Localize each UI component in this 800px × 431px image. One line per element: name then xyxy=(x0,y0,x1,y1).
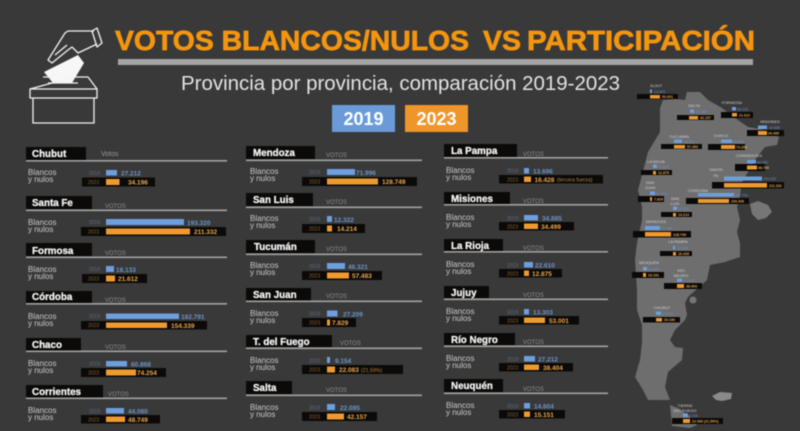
panel: La Pampa: 16.428 xyxy=(534,177,555,184)
mini chart: La Pampa: 13.696 xyxy=(677,246,688,250)
panel: Salta: 2019 xyxy=(309,406,320,412)
mini chart: Salta: 42.157 xyxy=(700,116,711,120)
mini chart: Salta xyxy=(677,103,714,120)
mini chart: Santa Fe: FE xyxy=(713,173,719,178)
panel: Misiones: 2023 xyxy=(507,224,518,230)
legend: 2023: 2023 xyxy=(416,109,457,129)
mini chart: Chaco: 74.254 xyxy=(736,146,747,150)
panel: San Luis: y nulos xyxy=(250,221,275,230)
map: Malvinas xyxy=(712,392,732,401)
panel: T. del Fuego: VOTOS xyxy=(340,341,361,347)
mini chart: Jujuy: 53.001 xyxy=(662,95,673,99)
panel: La Pampa: La Pampa xyxy=(451,146,498,157)
panel: Jujuy xyxy=(444,286,608,325)
panel: Corrientes xyxy=(26,385,227,424)
panel: Tucumán: 46.321 xyxy=(348,264,368,271)
mini chart: Santa Fe xyxy=(709,167,784,188)
panel: Córdoba: 2023 xyxy=(88,323,99,329)
mini chart: La Pampa xyxy=(660,239,692,256)
panel: Neuquén: 2023 xyxy=(507,412,518,418)
panel: Jujuy: 2019 xyxy=(507,310,518,316)
panel: Chaco: Chaco xyxy=(32,340,62,351)
panel: Neuquén: Blancos xyxy=(446,401,474,410)
panel: Chubut: y nulos xyxy=(28,175,53,184)
mini chart: Tierra del Fuego: DEL FUEGO xyxy=(674,408,696,413)
mini chart: Santa Fe: SANTA xyxy=(709,167,723,172)
panel: Córdoba: 182.791 xyxy=(181,314,205,321)
mini chart: Misiones: 34.499 xyxy=(768,132,779,136)
panel: Misiones xyxy=(444,192,608,231)
map: mainland silhouette xyxy=(635,92,779,400)
panel: Río Negro: 38.404 xyxy=(543,365,563,372)
panel: Misiones: VOTOS xyxy=(523,199,544,205)
mini chart: Formosa: FORMOSA xyxy=(722,100,742,105)
panel: Salta: VOTOS xyxy=(326,388,347,394)
panel: Corrientes: 48.749 xyxy=(128,417,148,424)
panel: Tucumán: Tucumán xyxy=(254,242,297,253)
panel: Tucumán: y nulos xyxy=(250,268,275,277)
mini chart: Neuquén: 14.604 xyxy=(648,268,659,272)
panel: Corrientes: y nulos xyxy=(28,413,53,422)
panel: La Rioja xyxy=(444,239,608,278)
panel: Río Negro: 2023 xyxy=(507,366,518,372)
map of Argentina with provincial mini charts xyxy=(632,83,784,428)
mini chart: Tucumán xyxy=(661,134,702,149)
mini chart: Misiones: 34.885 xyxy=(769,126,780,130)
panel: T. del Fuego: 22.083 xyxy=(339,367,359,374)
panel: Córdoba: VOTOS xyxy=(105,298,126,304)
panel: Formosa: 2023 xyxy=(88,276,99,282)
panel: La Rioja: 12.875 xyxy=(532,271,552,278)
panel: La Rioja: 22.610 xyxy=(535,262,555,270)
panel: Neuquén: VOTOS xyxy=(523,387,544,393)
panel: Mendoza xyxy=(246,146,422,186)
panel: Tucumán: 2019 xyxy=(309,264,320,270)
title: PARTICIPACIÓN xyxy=(527,25,755,56)
panel: Mendoza: y nulos xyxy=(250,174,275,183)
mini chart: Mendoza: MENDOZA xyxy=(646,219,666,224)
mini chart: Jujuy xyxy=(637,83,678,99)
mini chart: Corrientes xyxy=(735,153,769,171)
panel: La Rioja: Blancos xyxy=(446,260,474,269)
panel: San Juan: 2023 xyxy=(309,320,320,326)
panel: Mendoza: 128.749 xyxy=(382,179,406,186)
mini chart: La Rioja: 12.875 xyxy=(658,171,669,175)
panel: Tucumán: 57.483 xyxy=(352,273,372,280)
panel: Chubut: Chubut xyxy=(32,149,67,160)
panel: Santa Fe: y nulos xyxy=(28,225,53,234)
panel: Formosa xyxy=(26,243,227,283)
mini chart: La Pampa: 16.428 xyxy=(678,252,689,256)
map: Península Valdés xyxy=(690,296,696,304)
panel: Neuquén xyxy=(444,379,608,419)
mini chart: San Luis: 12.322 xyxy=(678,207,689,211)
panel: Santa Fe: Santa Fe xyxy=(32,198,73,209)
mini chart: Mendoza: 128.749 xyxy=(673,233,686,237)
panel: San Juan xyxy=(246,288,422,327)
panel: San Luis: 2019 xyxy=(309,217,320,223)
mini chart: San Juan: JUAN xyxy=(645,185,655,190)
mini chart: Neuquén: NEUQUÉN xyxy=(639,260,659,265)
panel: Jujuy: 53.001 xyxy=(549,318,569,325)
panel: Chaco: y nulos xyxy=(28,366,53,375)
panel: Salta: 22.085 xyxy=(340,405,360,412)
panel: San Juan: Blancos xyxy=(250,309,278,318)
panel: Tucumán: 2023 xyxy=(309,274,320,280)
panel: Chaco: 2019 xyxy=(89,362,100,368)
panel: Corrientes: 2019 xyxy=(89,409,100,415)
panel: Salta xyxy=(246,381,422,421)
panel: La Pampa xyxy=(444,144,608,184)
panel: San Juan: 27.209 xyxy=(343,312,363,318)
panel: San Juan: 7.829 xyxy=(332,320,349,327)
panel: Chaco: 2023 xyxy=(88,370,99,376)
mini chart: San Luis xyxy=(661,196,692,217)
panel: Chaco xyxy=(26,338,227,377)
mini chart: Córdoba xyxy=(686,188,749,204)
panel: La Rioja: 2019 xyxy=(507,263,518,269)
panel: Misiones: 34.885 xyxy=(542,216,562,222)
panel: Jujuy: Jujuy xyxy=(451,288,477,299)
panel: Neuquén: Neuquén xyxy=(451,381,493,392)
mini chart: Misiones: MISIONES xyxy=(760,119,780,124)
panel: Chubut: Blancos xyxy=(28,168,56,177)
panel: Mendoza: 2019 xyxy=(309,170,320,176)
panel: La Pampa: Blancos xyxy=(446,166,474,175)
mini chart: Chubut: CHUBUT xyxy=(654,305,671,310)
mini chart: Chubut: 34.196 xyxy=(664,318,675,322)
mini chart: Formosa xyxy=(721,100,753,118)
mini chart: San Juan: 27.209 xyxy=(656,192,667,196)
panel: Córdoba: 2019 xyxy=(89,314,100,320)
mini chart: Neuquén xyxy=(632,260,664,278)
panel: Santa Fe xyxy=(26,196,227,236)
panel: Córdoba: 154.339 xyxy=(171,323,195,330)
mini chart: San Juan: SAN xyxy=(646,180,654,185)
panel: Misiones: 2019 xyxy=(507,216,518,222)
panel: San Luis: San Luis xyxy=(253,195,294,206)
panel: Santa Fe: 2019 xyxy=(89,220,100,226)
mini chart: Mendoza: 71.996 xyxy=(661,226,672,230)
panel: Corrientes: 2023 xyxy=(88,418,99,424)
legend: 2019: 2019 xyxy=(343,109,384,129)
panel: San Luis: 12.322 xyxy=(334,217,354,224)
panel: Chubut: Votos xyxy=(101,151,119,158)
panel: San Luis: VOTOS xyxy=(326,200,347,206)
mini chart: Río Negro: 38.404 xyxy=(686,284,697,288)
panel: Neuquén: y nulos xyxy=(446,408,471,417)
legend xyxy=(332,105,468,132)
panel: Jujuy: Blancos xyxy=(446,307,474,316)
panel: Córdoba: y nulos xyxy=(28,319,53,328)
mini chart: Tierra del Fuego: TIERRA xyxy=(678,403,693,408)
panel: Salta: 42.157 xyxy=(347,414,367,421)
title rule xyxy=(118,59,753,65)
panel: Jujuy: y nulos xyxy=(446,314,471,323)
panel: San Luis: 2023 xyxy=(309,226,320,232)
mini chart: Misiones xyxy=(747,119,784,136)
panel: Jujuy: VOTOS xyxy=(523,293,544,299)
panel: Chaco: 74.254 xyxy=(137,370,157,377)
panel: Santa Fe: VOTOS xyxy=(105,204,126,210)
panel: Misiones: y nulos xyxy=(446,220,471,229)
panel: Chaco: VOTOS xyxy=(105,345,126,351)
mini chart: Chaco: CHACO xyxy=(714,133,728,138)
panel: Mendoza: Blancos xyxy=(250,167,278,176)
panel: T. del Fuego: 9.154 xyxy=(335,358,352,365)
icon: hand dropping ballot into box xyxy=(30,28,102,123)
mini chart: Tucumán: 57.483 xyxy=(687,145,698,149)
mini chart: Santa Fe: 193.320 xyxy=(763,177,776,181)
panel: Formosa: VOTOS xyxy=(105,251,126,257)
panel: Río Negro xyxy=(444,333,608,372)
panel: Chaco: 60.868 xyxy=(131,362,151,368)
panel: Corrientes: VOTOS xyxy=(108,392,129,398)
panel: San Luis: 14.214 xyxy=(337,226,357,233)
panel: Tucumán xyxy=(246,240,422,280)
panel: San Luis xyxy=(246,193,422,233)
panel: T. del Fuego: y nulos xyxy=(250,363,275,372)
mini chart: Corrientes: CORRIENTES xyxy=(736,153,762,158)
mini chart: Chaco xyxy=(708,133,747,150)
mini chart: Río Negro xyxy=(664,268,702,289)
panel: La Pampa: VOTOS xyxy=(523,152,544,158)
panel: Río Negro: 27.212 xyxy=(538,356,558,364)
panel: Corrientes: Blancos xyxy=(28,406,56,415)
panel: T. del Fuego: T. del Fuego xyxy=(253,337,310,348)
mini chart: Salta: SALTA xyxy=(688,103,700,108)
panel: Santa Fe: 2023 xyxy=(88,230,99,236)
panel: San Juan: y nulos xyxy=(250,316,275,325)
mini chart: Córdoba: CÓRDOBA xyxy=(688,188,708,193)
panel: Salta: Salta xyxy=(253,383,277,394)
panel: San Juan: San Juan xyxy=(253,290,297,301)
panel: Formosa: 21.612 xyxy=(118,276,138,283)
mini chart: Formosa: 21.612 xyxy=(739,114,750,118)
mini chart: Mendoza xyxy=(633,219,691,238)
mini chart: Río Negro: NEGRO xyxy=(674,273,688,278)
panel: Formosa: Formosa xyxy=(32,246,74,257)
panel: Córdoba: Blancos xyxy=(28,312,56,321)
panel: Formosa: 2019 xyxy=(89,267,100,273)
panel: Chubut: 27.212 xyxy=(121,170,141,178)
mini chart: Chubut xyxy=(643,305,680,322)
mini chart: San Luis: 14.214 xyxy=(678,213,689,217)
panel: Formosa: Blancos xyxy=(28,265,56,274)
mini chart: Corrientes: 44.080 xyxy=(757,160,768,164)
mini chart: Salta: 22.085 xyxy=(696,110,707,114)
panel: La Rioja: y nulos xyxy=(446,267,471,276)
mini chart: Tucumán: TUCUMÁN xyxy=(669,134,689,139)
mini chart: Neuquén: 15.151 xyxy=(648,274,659,278)
panel: Chubut: 2019 xyxy=(89,171,100,177)
mini chart: Tierra del Fuego: 22.083 (21,59%) xyxy=(692,420,719,424)
panel: San Luis: Blancos xyxy=(250,214,278,223)
panel: Santa Fe: 211.332 xyxy=(194,229,218,236)
title xyxy=(115,25,755,56)
title: VS xyxy=(483,25,521,56)
mini chart: Río Negro: RÍO xyxy=(677,268,685,273)
panel: Salta: y nulos xyxy=(250,410,275,419)
mini chart: Tierra del Fuego xyxy=(672,403,723,424)
panel: Santa Fe: Blancos xyxy=(28,218,56,227)
panel: Santa Fe: 193.320 xyxy=(187,220,211,227)
panel: Chaco: Blancos xyxy=(28,359,56,368)
mini chart: Formosa: 18.133 xyxy=(737,108,748,112)
panel: Neuquén: 15.151 xyxy=(534,412,554,419)
panel: Río Negro: VOTOS xyxy=(523,340,544,346)
panel: Salta: 2023 xyxy=(309,414,320,420)
panel: Mendoza: 71.996 xyxy=(356,170,376,177)
panel: La Rioja: VOTOS xyxy=(523,246,544,252)
mini chart: Río Negro: 27.212 xyxy=(683,279,694,283)
title: VOTOS BLANCOS/NULOS xyxy=(115,25,469,56)
mini chart: Chubut: 27.212 xyxy=(662,312,673,316)
panel: Mendoza: 2023 xyxy=(309,180,320,186)
mini chart: Tierra del Fuego: 9.154 xyxy=(689,414,698,418)
mini chart: San Luis: LUIS xyxy=(671,201,680,206)
panel: Córdoba xyxy=(26,291,227,330)
mini chart: Jujuy: JUJUY xyxy=(650,83,663,88)
mini chart: Santa Fe: 211.332 xyxy=(769,184,782,188)
panel: T. del Fuego: Blancos xyxy=(250,356,278,365)
panel: T. del Fuego xyxy=(246,335,422,374)
panel: La Pampa: 2023 xyxy=(507,178,518,184)
mini chart: La Pampa: LA PAMPA xyxy=(668,239,688,244)
panel: Río Negro: 2019 xyxy=(507,357,518,363)
panel: Tucumán: Blancos xyxy=(250,261,278,270)
panel: Neuquén: 2019 xyxy=(507,404,518,410)
panel: Misiones: Blancos xyxy=(446,213,474,222)
panel: Jujuy: 2023 xyxy=(507,318,518,324)
panel: Misiones: Misiones xyxy=(451,194,493,205)
mini chart: Córdoba: 154.339 xyxy=(731,200,744,204)
mini chart: La Rioja: 22.610 xyxy=(658,165,669,169)
panel: Corrientes: Corrientes xyxy=(32,387,82,398)
mini chart: San Juan xyxy=(638,180,667,202)
panel: Jujuy: 13.303 xyxy=(533,310,553,316)
panel: Río Negro: y nulos xyxy=(446,361,471,370)
map: Uruguay shape xyxy=(750,201,772,220)
panel: La Pampa: (tercera fuerza) xyxy=(557,178,593,184)
panel: Chubut: 2023 xyxy=(88,180,99,186)
panel: Formosa: 18.133 xyxy=(116,267,136,274)
mini chart: La Rioja xyxy=(641,159,672,175)
panel: T. del Fuego: 2023 xyxy=(309,368,320,374)
panel: Córdoba: Córdoba xyxy=(32,292,73,303)
panel: Chubut: 34.196 xyxy=(128,180,148,186)
panel: T. del Fuego: 2019 xyxy=(309,358,320,364)
map: Tierra del Fuego xyxy=(670,405,697,428)
mini chart: Jujuy: 13.303 xyxy=(654,90,665,94)
panel: Formosa: y nulos xyxy=(28,272,53,281)
panel: La Rioja: La Rioja xyxy=(451,241,490,252)
panel: Río Negro: Blancos xyxy=(446,354,474,363)
panel: Mendoza: Mendoza xyxy=(253,148,295,159)
mini chart: Tucumán: 46.321 xyxy=(684,140,695,144)
panel: Chubut xyxy=(26,147,227,186)
mini chart: San Luis: SAN xyxy=(671,196,679,201)
mini chart: Chaco: 60.868 xyxy=(733,140,744,144)
panel: La Pampa: y nulos xyxy=(446,173,471,182)
panel: San Juan: VOTOS xyxy=(326,294,347,300)
panel: La Rioja: 2023 xyxy=(507,272,518,278)
panel: San Juan: 2019 xyxy=(309,312,320,318)
panel: La Pampa: 2019 xyxy=(507,168,518,174)
panel: Neuquén: 14.604 xyxy=(534,404,554,410)
panel: Tucumán: VOTOS xyxy=(326,247,347,253)
subtitle: Provincia por provincia, comparación 2019-2023 xyxy=(181,72,620,95)
panel: Mendoza: VOTOS xyxy=(326,153,347,159)
mini chart: La Rioja: LA RIOJA xyxy=(647,159,665,164)
panel: Río Negro: Río Negro xyxy=(451,335,498,346)
panel: Corrientes: 44.080 xyxy=(128,408,148,416)
panel: T. del Fuego: (21,59%) xyxy=(361,368,382,374)
panel: Misiones: 34.499 xyxy=(541,224,561,231)
panel: La Pampa: 13.696 xyxy=(533,168,553,176)
panel: Salta: Blancos xyxy=(250,403,278,412)
mini chart: Corrientes: 48.749 xyxy=(758,166,769,170)
mini chart: Córdoba: 182.791 xyxy=(735,194,748,198)
mini chart: San Juan: 7.829 xyxy=(654,198,663,202)
